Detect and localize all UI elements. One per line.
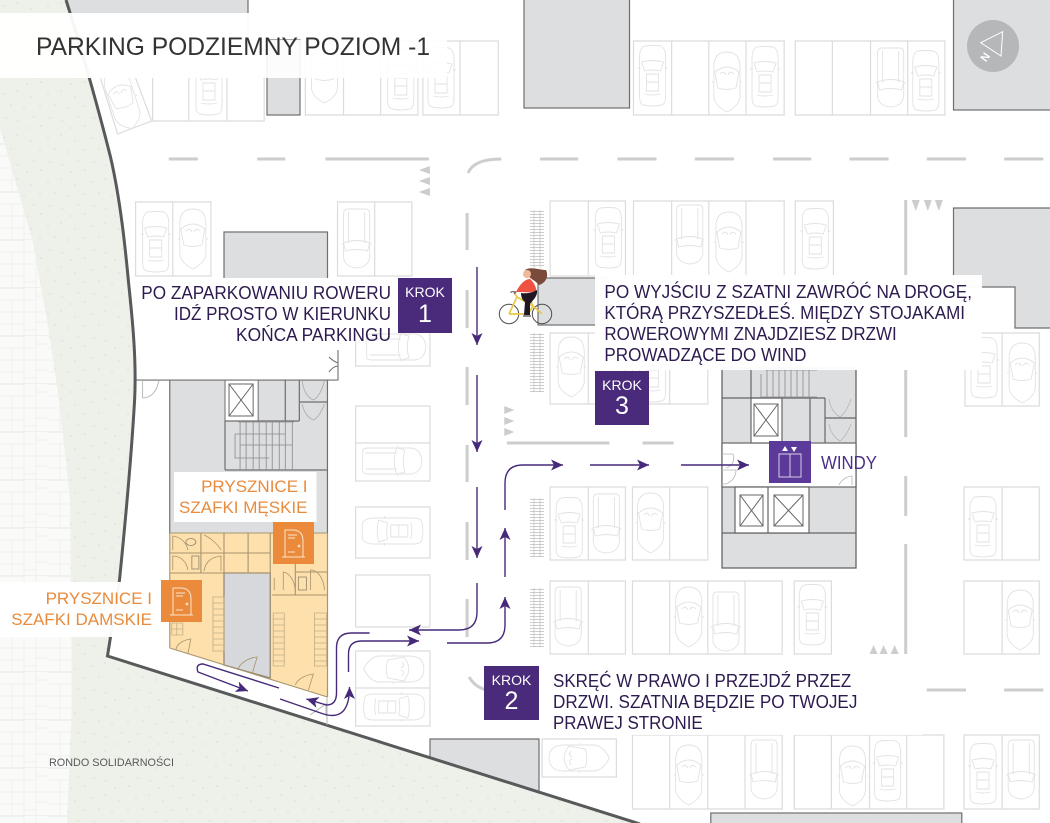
- core: shaft room: [225, 380, 258, 421]
- text: women's showers: SZAFKI DAMSKIE: [11, 610, 152, 629]
- step 2 text: [553, 670, 857, 733]
- core: shaft: [229, 384, 253, 416]
- panel: step 2 text background: [539, 665, 922, 735]
- lower shafts: [740, 495, 803, 526]
- core: door arcs: [143, 381, 324, 420]
- arrow: straight down 1: [476, 267, 478, 345]
- step 2 text: PRAWEJ STRONIE: [553, 713, 703, 733]
- road markings: [169, 159, 1043, 690]
- arrow: curve up and right: [505, 465, 563, 510]
- background: paving: [0, 128, 72, 823]
- corridor: [722, 443, 856, 487]
- panel: men's label background: [174, 472, 316, 522]
- step 3 badge: 3: [615, 392, 629, 420]
- door arcs: [722, 399, 852, 485]
- room walls: [170, 533, 327, 697]
- bays: fourth row: [550, 581, 1039, 654]
- block: bottom wedge: [430, 739, 539, 793]
- background: green lawn with wall boundary: [0, 0, 640, 823]
- step 3 badge: KROK: [602, 377, 642, 393]
- step 2 text: DRZWI. SZATNIA BĘDZIE PO TWOJEJ: [553, 692, 857, 712]
- arrow: curve down to left: [409, 583, 477, 630]
- left upper core: [136, 380, 338, 697]
- central grey room: [224, 573, 270, 678]
- icon: women's door: [161, 580, 202, 622]
- panel: step 1 text background: [137, 278, 398, 380]
- block: top centre: [524, 0, 630, 108]
- arrow: around to the door: [306, 633, 370, 705]
- stairs: [761, 370, 817, 397]
- bays: left column: [356, 333, 430, 726]
- text: men's showers: PRYSZNICE I: [201, 477, 308, 496]
- step 3 text: PROWADZĄCE DO WIND: [604, 345, 806, 365]
- compass: N: [979, 51, 993, 64]
- step 2 badge: KROK: [492, 672, 532, 688]
- block: top small: [267, 40, 300, 115]
- parking bays: right part: [542, 41, 1039, 809]
- road lines: left part: [169, 159, 514, 690]
- text: men's showers: [179, 477, 308, 517]
- step 1 text: IDŹ PROSTO W KIERUNKU: [174, 304, 391, 324]
- boundary wall: [66, 0, 640, 823]
- title panel: [0, 13, 447, 78]
- route arrows: [197, 267, 749, 715]
- icon: lift: [769, 441, 811, 483]
- text: women's showers: PRYSZNICE I: [46, 589, 152, 608]
- text: place name: RONDO SOLIDARNOŚCI: [49, 756, 174, 769]
- core: stairs: [235, 422, 294, 470]
- panel: step 3 text background: [595, 275, 982, 370]
- bays: second row centre: [550, 201, 833, 276]
- parking bays: left part: [100, 40, 498, 726]
- step 3 badge: [595, 371, 649, 425]
- text: lifts: WINDY: [821, 453, 877, 473]
- block: top right: [954, 0, 1050, 110]
- lower rooms: [735, 487, 809, 533]
- title: PARKING PODZIEMNY POZIOM -1: [36, 33, 430, 61]
- lift core: [722, 368, 856, 568]
- step 1 badge: KROK: [405, 284, 445, 300]
- step 3 text: [604, 281, 972, 365]
- building at the lower edge, small door: [310, 697, 327, 725]
- step 1 text: PO ZAPARKOWANIU ROWERU: [141, 283, 391, 303]
- arrow: u-turn inside room: [197, 664, 279, 691]
- step 3 text: ROWEROWYMI ZNAJDZIESZ DRZWI: [604, 324, 897, 344]
- block: top left edge: [247, 0, 249, 39]
- arrow: to the lifts: [681, 464, 749, 466]
- block: right side: [954, 208, 1050, 328]
- arrow: back from left, curve up: [447, 597, 505, 643]
- block: middle left: [224, 232, 328, 292]
- building line under step 1: [137, 350, 338, 380]
- bays: second row left: [136, 202, 412, 276]
- parked cars: right part: [549, 46, 1037, 806]
- road lines: right part: [507, 159, 1043, 690]
- step 2 badge: [484, 666, 539, 720]
- step 1 badge: 1: [418, 300, 432, 328]
- parked cars: left part: [99, 43, 456, 722]
- bay: angled near wall: [100, 40, 152, 134]
- bays: top row middle: [305, 41, 498, 115]
- arrow: straight down 3: [476, 487, 478, 558]
- lockers: [172, 597, 326, 666]
- step 2 badge: 2: [505, 687, 518, 715]
- icon: men's door: [273, 522, 314, 564]
- text: women's showers: [11, 589, 152, 629]
- bays: bottom row: [542, 735, 1039, 809]
- step 3 text: PO WYJŚCIU Z SZATNI ZAWRÓĆ NA DROGĘ,: [604, 281, 972, 302]
- bays: third row: [550, 333, 1039, 560]
- arrow: straight down 2: [476, 375, 478, 452]
- block: next to cyclist: [538, 278, 608, 325]
- compass: [967, 20, 1019, 72]
- step 1 text: KOŃCA PARKINGU: [236, 325, 391, 345]
- arrow: straight right: [590, 464, 649, 466]
- panel: women's label background: [0, 582, 161, 637]
- block: bottom centre: [711, 813, 962, 823]
- core: walls: [136, 380, 338, 697]
- bays: top row right: [633, 41, 945, 115]
- cyclist: [499, 268, 552, 324]
- walls: [722, 368, 856, 533]
- arrow: straight up: [504, 528, 506, 577]
- step 3 text: KTÓRĄ PRZYSZEDŁEŚ. MIĘDZY STOJAKAMI: [604, 302, 965, 323]
- changing rooms: orange floor: [170, 533, 327, 697]
- door arcs and fixtures: [173, 535, 324, 690]
- bays: top row left: [153, 47, 264, 121]
- step 1 badge: [398, 278, 452, 333]
- block: top left: [66, 0, 248, 13]
- arrow: into changing-room door: [348, 641, 419, 672]
- step 1 text: [141, 283, 391, 345]
- bike racks: [530, 210, 544, 647]
- step 2 text: SKRĘĆ W PRAWO I PRZEJDŹ PRZEZ: [553, 670, 851, 691]
- upper shaft room: [751, 398, 782, 443]
- upper shaft: [754, 404, 778, 436]
- text: men's showers: SZAFKI MĘSKIE: [179, 498, 308, 517]
- arrow: from door up: [280, 687, 350, 715]
